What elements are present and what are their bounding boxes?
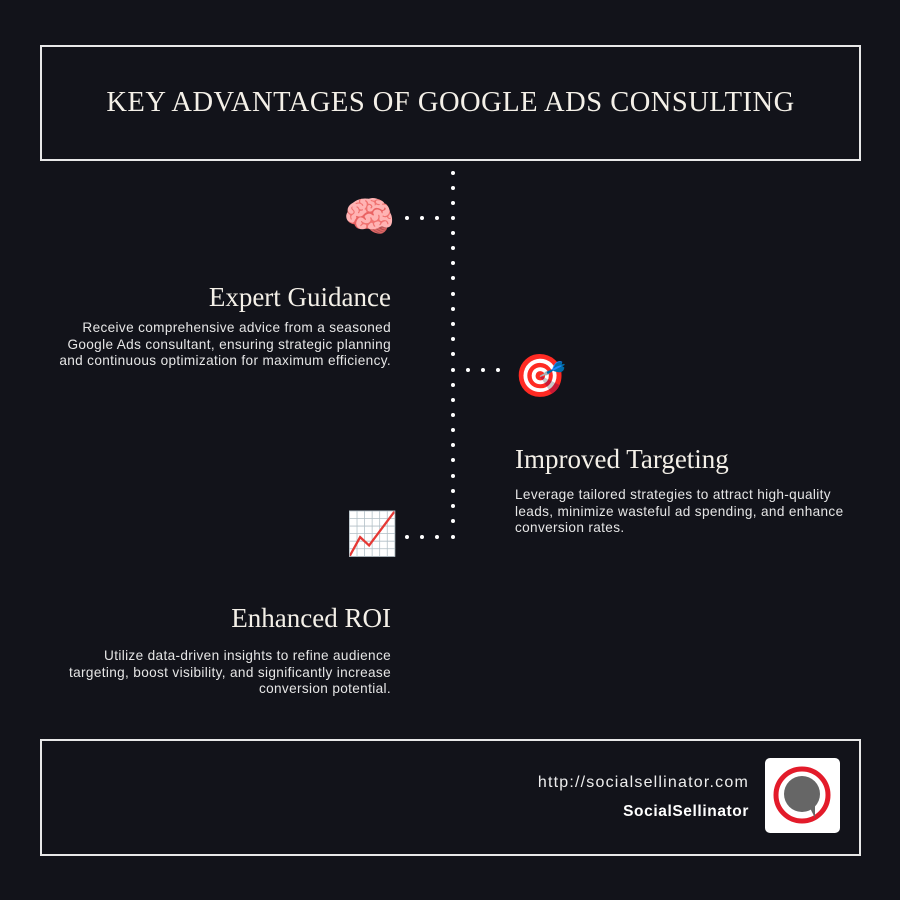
text: improved targeting: Leverage tailored strategies to attract high-quality <box>515 487 831 502</box>
heading: Improved Targeting: Improved Targeting <box>515 444 729 474</box>
text: expert guidance: Google Ads consultant, ensuring strategic planning <box>67 336 391 352</box>
text: expert guidance: Receive comprehensive advice from a seasoned <box>82 320 391 335</box>
text: improved targeting: leads, minimize wasteful ad spending, and enhance <box>515 504 844 518</box>
text: enhanced roi: Utilize data-driven insights to refine audience <box>104 648 391 663</box>
text: improved targeting <box>515 487 844 535</box>
icon: target: 🎯 <box>514 352 566 399</box>
heading: Expert Guidance: Expert Guidance <box>209 282 391 312</box>
icon: chart: 📈 <box>346 510 398 557</box>
text: enhanced roi: conversion potential. <box>259 681 391 696</box>
title <box>40 45 861 161</box>
footer <box>40 739 861 856</box>
text: expert guidance: and continuous optimization for maximum efficiency. <box>59 353 391 368</box>
text: enhanced roi <box>69 648 391 696</box>
icon: brain: 🧠 <box>343 193 395 240</box>
text: enhanced roi: targeting, boost visibility, and significantly increase <box>69 664 391 680</box>
text: improved targeting: conversion rates. <box>515 520 624 535</box>
heading: Enhanced ROI: Enhanced ROI <box>231 603 391 633</box>
footer url: http://socialsellinator.com <box>538 774 749 791</box>
title: KEY ADVANTAGES OF GOOGLE ADS CONSULTING <box>106 87 795 118</box>
text: expert guidance <box>59 320 391 368</box>
footer brand: SocialSellinator <box>623 803 749 820</box>
logo <box>765 758 840 833</box>
